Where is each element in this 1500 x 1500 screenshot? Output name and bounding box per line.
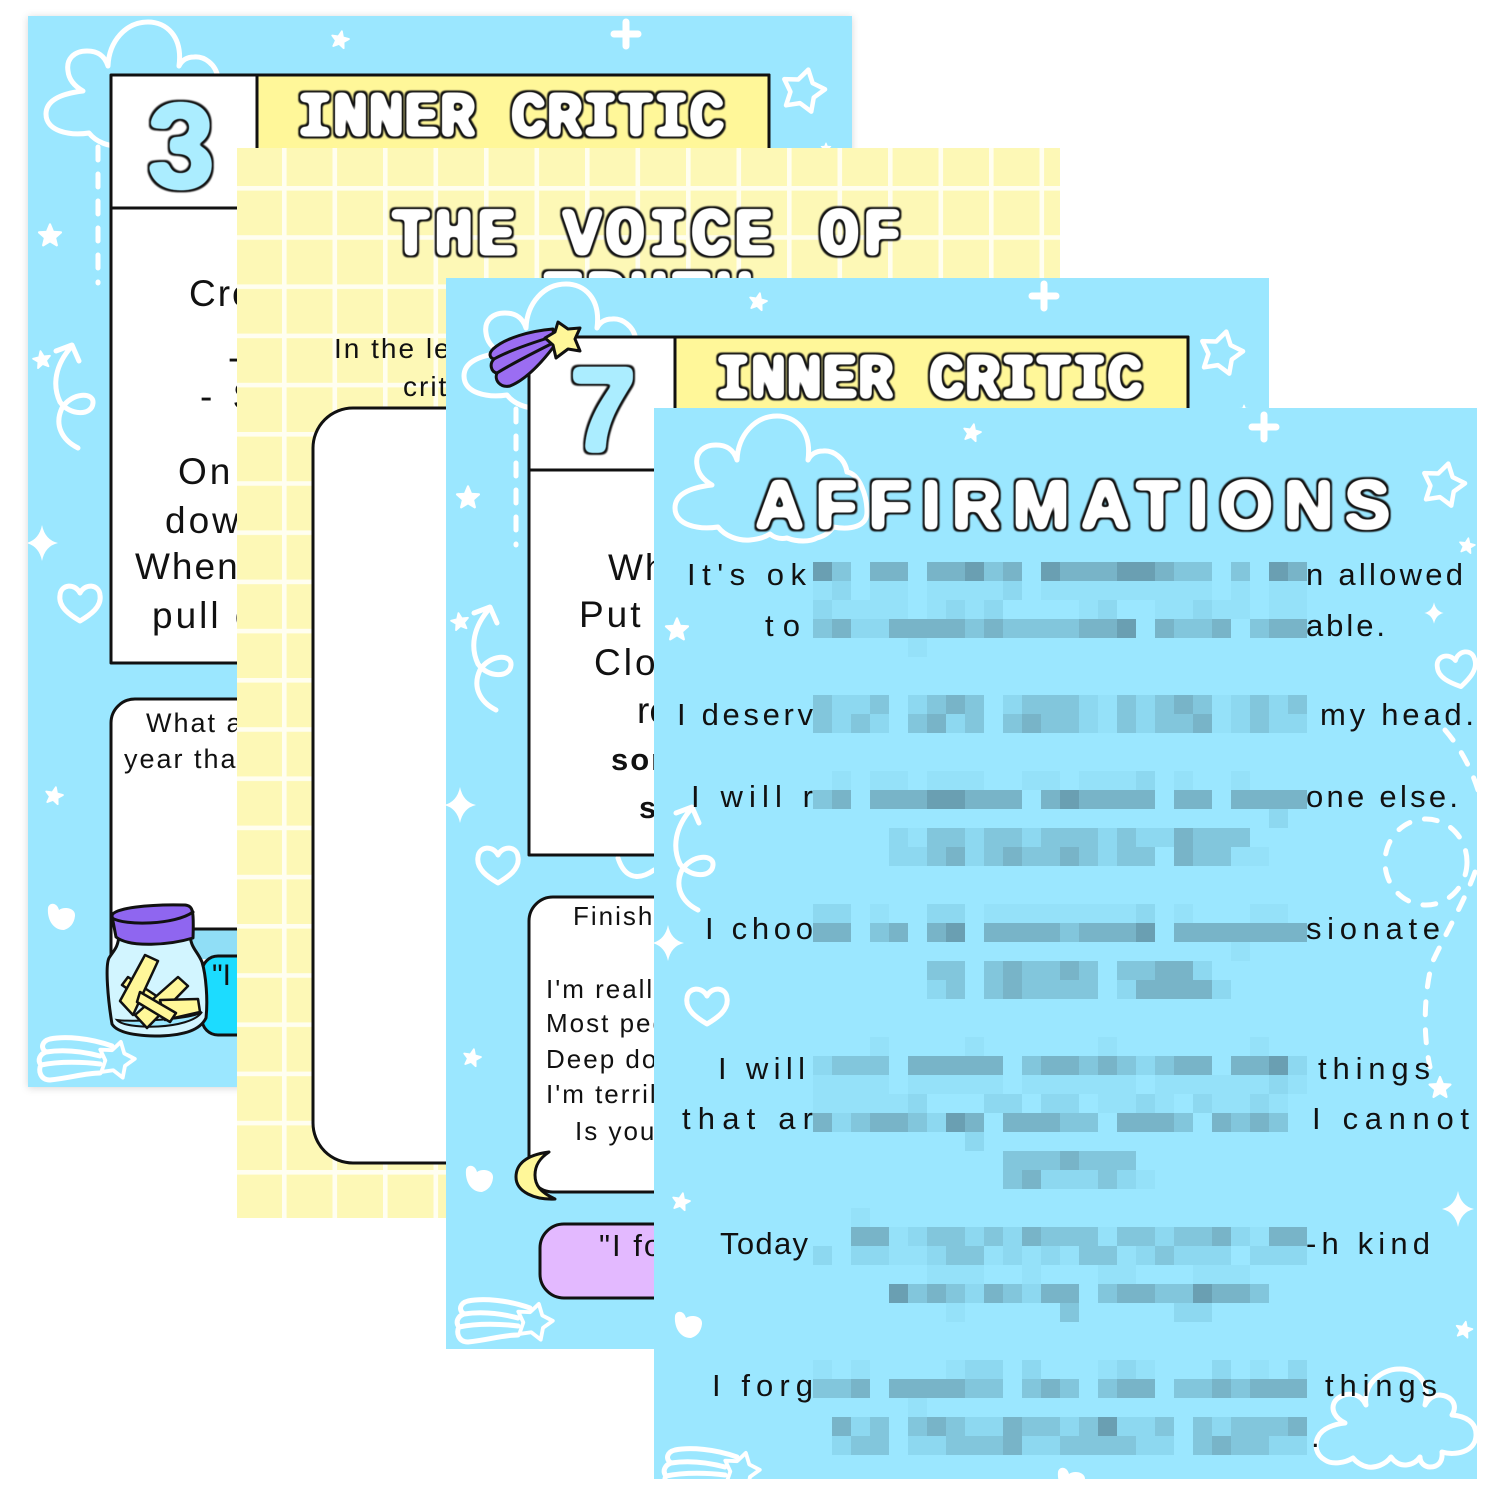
affirmation text fragments: I choo	[705, 911, 813, 946]
affirmation text fragments: Today	[720, 1226, 808, 1261]
affirmation text fragments: things	[1318, 1051, 1430, 1086]
sheet 2 instructions: crit	[403, 371, 448, 402]
sheet 1 body text	[135, 273, 265, 636]
affirmation text fragments: I forg	[712, 1368, 813, 1403]
sheet 2 title: THE VOICE OF	[391, 199, 902, 274]
sheet 4 background doodles	[652, 415, 1480, 1494]
sheet 2 title	[391, 199, 902, 336]
affirmation text fragments: -h kind	[1306, 1226, 1430, 1261]
sheet 1 box lower edge	[190, 928, 260, 930]
sheet 1 title band	[257, 75, 769, 208]
sheet 1 body text: pull o	[152, 595, 258, 636]
sheet 1 body text: down	[165, 500, 265, 541]
sheet 3 body text	[579, 547, 680, 825]
sheet 3 question box: I'm really	[546, 974, 669, 1004]
affirmation text fragments: It's ok	[687, 557, 806, 592]
sheet 3 panel body	[529, 337, 1188, 855]
affirmation text fragments: I deserv	[677, 697, 814, 732]
affirmation text fragments: .	[1311, 1419, 1320, 1454]
sheet 1 question box: year tha	[124, 744, 238, 774]
affirmation text fragments: my head.	[1320, 697, 1474, 732]
sheet 2 writing panel	[313, 408, 1013, 1163]
sheet 1 background doodles	[26, 22, 831, 1080]
sheet 3 body text: s	[639, 790, 656, 825]
sheet 2 title: TRUTH	[543, 261, 754, 336]
affirmation text fragments: able.	[1306, 608, 1385, 643]
affirmation text fragments: sionate	[1306, 911, 1440, 946]
sheet 3: inner critic card 7	[444, 278, 1269, 1349]
sheet 3 body text: sor	[611, 742, 665, 777]
sheet 3 body text: re	[637, 690, 670, 731]
sheet 1: inner critic card 3	[26, 16, 852, 1087]
icon: jar of paper strips	[107, 905, 207, 1036]
affirmation text fragments: one else.	[1306, 779, 1458, 814]
sheet 3 question box: Deep dow	[546, 1044, 679, 1074]
sheet 1 body text: Whene	[135, 546, 262, 587]
affirmation text fragments	[677, 557, 1474, 1454]
sheet 1 body text: -	[228, 337, 240, 378]
sheet 2 instructions: In the le	[334, 333, 452, 364]
sheet 1 cyan button	[202, 956, 282, 1035]
sheet 3 divider and number 7: 7	[570, 343, 636, 477]
sheet 1 body text: Cre	[189, 273, 255, 314]
affirmation text fragments: that ar	[682, 1101, 813, 1136]
sheet 3 main panel	[618, 858, 654, 876]
sheet 3 question box: Finish	[573, 901, 654, 931]
sheet 1 body text: - S	[200, 376, 262, 417]
sheet 3 question box: Is your	[575, 1116, 667, 1146]
sheet 1 body text: On	[178, 451, 233, 492]
sheet 1 question box: What a	[146, 708, 244, 738]
sheet 3 question box: I'm terril	[546, 1079, 658, 1109]
affirmation text fragments: I cannot	[1312, 1101, 1469, 1136]
sheet 3 purple button	[540, 1224, 840, 1298]
sheet 1 strip under box	[190, 929, 260, 959]
affirmation text fragments: things	[1325, 1368, 1437, 1403]
sheet 3 title band	[675, 337, 1188, 470]
sheet 3 question box: Most peo	[546, 1008, 669, 1038]
sheet 3 background doodles	[444, 284, 1249, 1342]
icon: purple shooting star	[490, 322, 580, 386]
sheet 2 instructions	[334, 333, 452, 402]
sheet 1 cyan button: "I	[212, 959, 231, 992]
sheet 3 title band: INNER CRITIC	[715, 345, 1143, 416]
icon: crescent moon	[516, 1152, 555, 1199]
sheet 3 purple button: "I fo	[599, 1228, 663, 1263]
affirmation text fragments: I will r	[691, 779, 813, 814]
sheet 1 question box	[111, 699, 511, 999]
sheet 1 title band: INNER CRITIC	[297, 83, 725, 154]
sheet 4: affirmations	[652, 408, 1480, 1494]
affirmation text fragments: n allowed	[1306, 557, 1463, 592]
sheet 3 question box	[529, 897, 929, 1192]
affirmation text fragments: to	[765, 608, 800, 643]
sheet 2: the voice of truth	[237, 148, 1060, 1218]
sheet 3 body text: Clos	[594, 642, 680, 683]
sheet 3 body text: Wh	[608, 547, 668, 588]
sheet 1 main panel	[111, 75, 769, 663]
pixelated censored affirmation lines	[813, 562, 1307, 1455]
sheet 3 body text: Put	[579, 594, 644, 635]
sheet 1 divider and number 3: 3	[148, 79, 214, 213]
affirmation text fragments: I will	[718, 1051, 805, 1086]
sheet 4 title: AFFIRMATIONS	[755, 467, 1390, 543]
